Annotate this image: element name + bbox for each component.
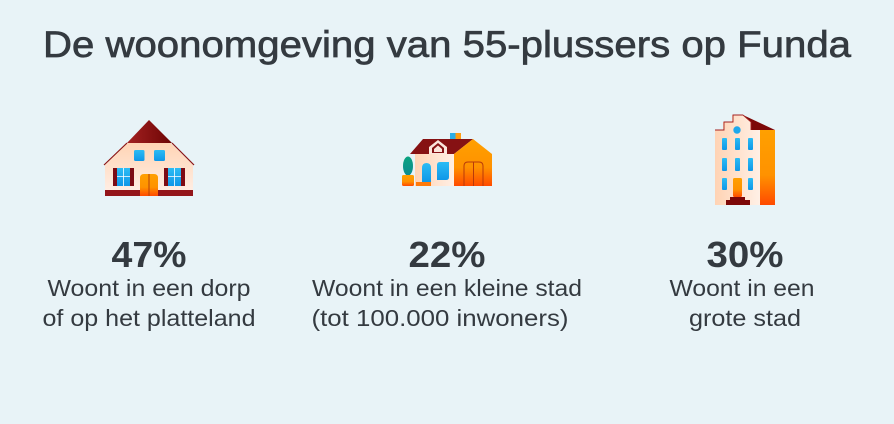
percentage: 30% — [706, 234, 784, 275]
icon: small town house — [402, 133, 492, 186]
description — [42, 275, 256, 331]
description: Woont in een — [670, 275, 814, 301]
title: De woonomgeving van 55-plussers op Funda — [43, 23, 851, 65]
icon: village house — [104, 120, 194, 196]
percentage: 22% — [408, 234, 486, 275]
description: of op het platteland — [42, 305, 256, 331]
description: Woont in een dorp — [48, 275, 250, 301]
panel: kleine stad — [312, 133, 582, 331]
panel: dorp of platteland — [42, 120, 256, 331]
description: (tot 100.000 inwoners) — [312, 305, 568, 331]
description: Woont in een kleine stad — [312, 275, 582, 301]
panel: grote stad — [670, 115, 814, 331]
description — [312, 275, 582, 331]
description: grote stad — [689, 305, 801, 331]
description — [670, 275, 814, 331]
percentage: 47% — [112, 234, 186, 275]
icon: city townhouse — [715, 115, 775, 205]
